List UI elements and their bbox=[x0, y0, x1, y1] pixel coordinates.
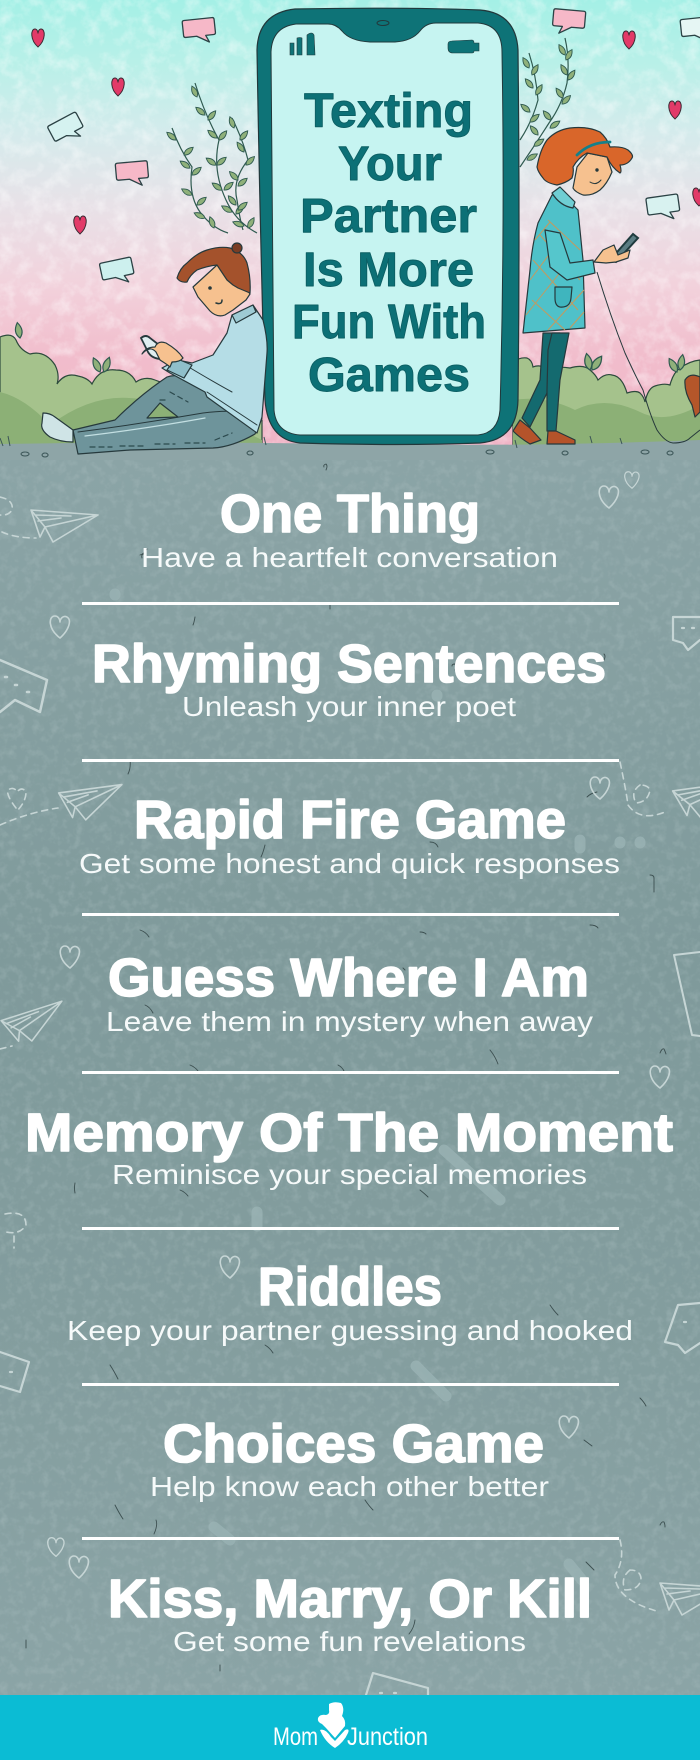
battery bbox=[448, 40, 479, 53]
man sitting with phone bbox=[42, 243, 267, 454]
phone title bbox=[292, 85, 486, 402]
doodles: chat bubbles bbox=[0, 617, 700, 1695]
item: Riddles bbox=[67, 1257, 633, 1346]
sky background bbox=[0, 0, 700, 445]
item: Kiss, Marry, Or Kill: Kiss, Marry, Or Kill bbox=[108, 1569, 592, 1629]
phone title: Is More bbox=[303, 244, 474, 297]
woman: coat bbox=[523, 187, 585, 333]
footer bar bbox=[0, 1695, 700, 1760]
woman: phone and hand bbox=[594, 234, 638, 263]
item: Guess Where I Am bbox=[106, 948, 593, 1037]
item: Riddles: Riddles bbox=[258, 1257, 442, 1317]
item: Choices Game bbox=[150, 1414, 549, 1502]
small brown pet at edge bbox=[685, 375, 700, 417]
man: head and hair bbox=[177, 243, 250, 316]
doodles: paper planes bbox=[1, 510, 700, 1615]
phone title: Partner bbox=[300, 190, 477, 243]
item: Rapid Fire Game bbox=[79, 790, 620, 879]
phone title: Fun With bbox=[292, 296, 486, 349]
item: Guess Where I Am: Guess Where I Am bbox=[108, 948, 589, 1008]
divider lines bbox=[82, 602, 619, 1540]
woman: shoes bbox=[513, 420, 575, 444]
woman: head and hair bbox=[537, 128, 632, 195]
signal bars bbox=[290, 33, 315, 55]
bushes, right bbox=[513, 353, 700, 445]
item: Memory Of The Moment bbox=[25, 1103, 673, 1190]
item: Memory Of The Moment: Reminisce your special memories bbox=[112, 1159, 587, 1190]
phone title: Texting bbox=[304, 85, 473, 138]
woman: coat sleeve bbox=[545, 230, 595, 280]
phone title: Your bbox=[338, 138, 442, 191]
item: Choices Game: Choices Game bbox=[163, 1414, 544, 1474]
doodles: hearts bbox=[48, 472, 669, 1578]
floating hearts bbox=[32, 29, 700, 234]
doodles: dashed trails bbox=[0, 497, 665, 1612]
MomJunction logo: Mom bbox=[273, 1723, 318, 1751]
item: Choices Game: Help know each other better bbox=[150, 1471, 549, 1502]
item: One Thing bbox=[141, 484, 558, 573]
item: Rapid Fire Game: Get some honest and quick responses bbox=[79, 848, 620, 879]
man: trousers bbox=[73, 376, 262, 454]
phone camera bbox=[377, 20, 389, 26]
item: Rhyming Sentences bbox=[92, 634, 606, 722]
thin dark squiggles bbox=[26, 464, 666, 1671]
header illustration bbox=[0, 0, 700, 475]
item: Memory Of The Moment: Memory Of The Moment bbox=[25, 1103, 673, 1163]
list panel background bbox=[0, 460, 700, 1696]
item: Riddles: Keep your partner guessing and hooked bbox=[67, 1315, 633, 1346]
item: Kiss, Marry, Or Kill: Get some fun revelations bbox=[173, 1626, 526, 1657]
phone bbox=[257, 8, 519, 444]
item: Rhyming Sentences: Rhyming Sentences bbox=[92, 634, 606, 694]
phone body bbox=[257, 8, 519, 444]
item: Guess Where I Am: Leave them in mystery when away bbox=[106, 1006, 593, 1037]
item: Kiss, Marry, Or Kill bbox=[108, 1569, 592, 1657]
MomJunction logo: Junction bbox=[347, 1723, 428, 1751]
floating chat bubbles bbox=[47, 9, 700, 287]
ground pebbles and grass bbox=[0, 436, 673, 457]
man: shoe bbox=[42, 413, 73, 442]
man: hands and phone bbox=[141, 336, 183, 367]
woman: back leg bbox=[522, 333, 560, 427]
bushes, left bbox=[0, 322, 262, 445]
ground strip bbox=[0, 440, 700, 475]
MomJunction logo bbox=[273, 1702, 428, 1751]
plant stems and leaves, right bbox=[519, 38, 577, 167]
item: One Thing: Have a heartfelt conversation bbox=[141, 542, 558, 573]
item: Rhyming Sentences: Unleash your inner poet bbox=[182, 691, 516, 722]
item: Rapid Fire Game: Rapid Fire Game bbox=[134, 790, 566, 850]
phone title: Games bbox=[308, 349, 470, 402]
plant stems and leaves, left bbox=[165, 83, 257, 233]
earphone wire bbox=[597, 272, 700, 443]
woman: front leg bbox=[547, 333, 569, 431]
man: sweater bbox=[162, 305, 267, 433]
item: One Thing: One Thing bbox=[220, 484, 480, 544]
phone screen bbox=[271, 23, 503, 435]
woman standing with phone bbox=[513, 128, 700, 444]
brush smudges bbox=[115, 594, 640, 1580]
